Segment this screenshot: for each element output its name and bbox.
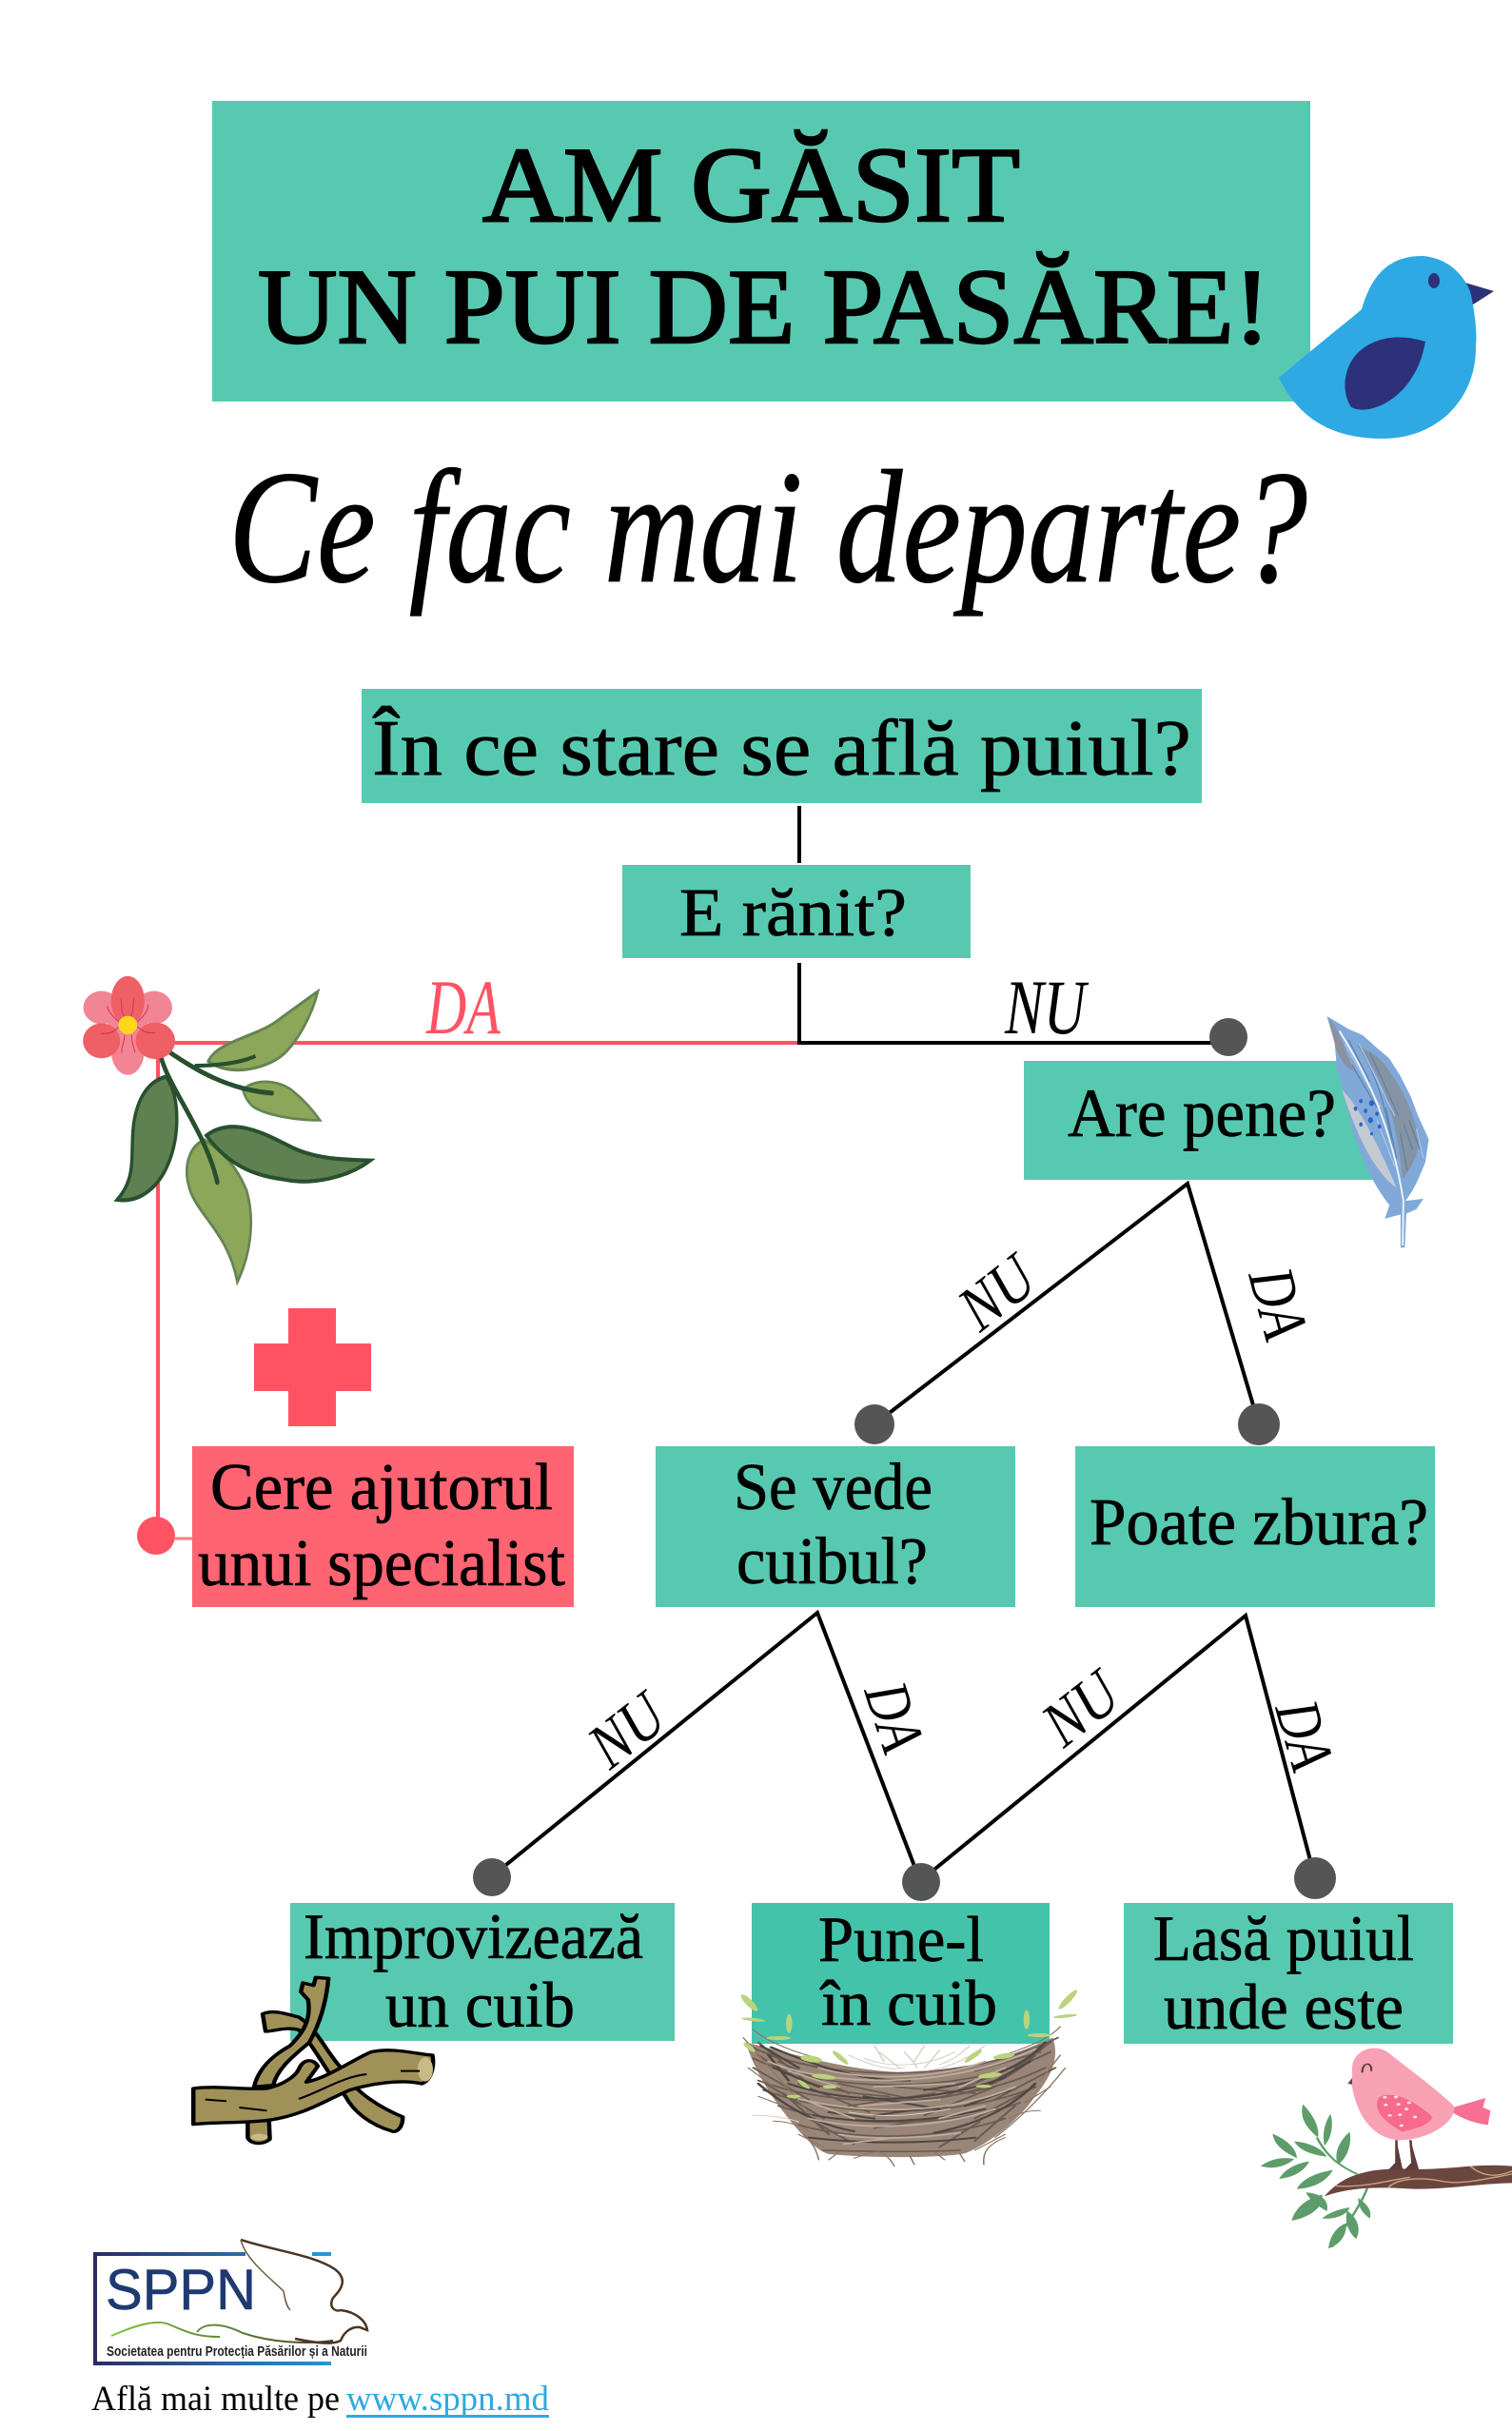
label: DA poate zbura: DA <box>1261 1692 1347 1778</box>
label: NU are pene: NU <box>944 1239 1051 1344</box>
label: DA se vede: DA <box>850 1673 938 1761</box>
box: pune-l <box>752 1903 1050 2044</box>
title banner: UN PUI DE PASĂRE! <box>258 248 1270 366</box>
dot: poate zbura <box>1238 1403 1280 1445</box>
box: main question: În ce stare se află puiul? <box>372 704 1191 793</box>
box: improvizeaza: un cuib <box>385 1969 575 2041</box>
dot: se vede <box>854 1404 894 1444</box>
connector: question to E rănit <box>797 806 801 863</box>
box: se vede cuibul <box>656 1446 1015 1607</box>
box: lasa puiul: unde este <box>1164 1970 1404 2043</box>
box: cere ajutorul: Cere ajutorul <box>210 1451 553 1524</box>
connector: are pene branches <box>874 1184 1259 1424</box>
label: DA red: DA <box>425 964 501 1050</box>
dot: red <box>137 1517 175 1555</box>
box: lasa puiul: Lasă puiul <box>1153 1902 1414 1974</box>
icon: nest <box>738 1989 1080 2166</box>
connector: black NU branch <box>799 963 1213 1043</box>
box: pune-l: Pune-l <box>818 1903 984 1975</box>
connector: poate zbura branches <box>920 1616 1315 1881</box>
connector: se vede branches <box>492 1613 920 1881</box>
label: NU se vede: NU <box>574 1676 681 1782</box>
box: improvizeaza <box>290 1900 675 2041</box>
box: are pene <box>1024 1061 1377 1180</box>
dot: improvizeaza <box>473 1858 511 1896</box>
icon: twigs <box>193 1977 433 2144</box>
box: e ranit <box>622 865 971 958</box>
box: improvizeaza: Improvizează <box>304 1900 643 1972</box>
footer text with link: Află mai multe pe <box>91 2380 340 2419</box>
title banner: AM GĂSIT <box>482 127 1020 245</box>
box: are pene: Are pene? <box>1068 1075 1336 1151</box>
connector: dot to cere ajutorul <box>175 1538 192 1539</box>
box: se vede cuibul: Se vede <box>734 1451 933 1524</box>
footer text with link <box>91 2380 549 2419</box>
label: DA are pene: DA <box>1234 1259 1323 1347</box>
dot: are pene <box>1209 1018 1247 1056</box>
footer text with link: www.sppn.md <box>346 2380 549 2419</box>
dot: lasa puiul <box>1294 1857 1336 1899</box>
box: poate zbura <box>1075 1446 1435 1607</box>
dot: pune-l <box>902 1863 940 1901</box>
box: pune-l: în cuib <box>819 1967 997 2039</box>
box: se vede cuibul: cuibul? <box>736 1525 928 1598</box>
box: cere ajutorul: unui specialist <box>198 1527 566 1600</box>
box: e ranit: E rănit? <box>679 874 907 951</box>
title banner <box>212 101 1310 402</box>
logo: SPPN: Societatea pentru Protecția Păsărilor și a Naturii <box>107 2343 367 2360</box>
box: lasa puiul <box>1124 1902 1453 2044</box>
icon: medical cross <box>254 1308 371 1426</box>
box: cere ajutorul <box>192 1446 574 1607</box>
box: poate zbura: Poate zbura? <box>1090 1486 1428 1559</box>
icon: feather <box>1326 1016 1429 1247</box>
flower and leaves <box>83 976 370 1282</box>
label: NU top: NU <box>1004 964 1090 1050</box>
logo: SPPN: SPPN <box>106 2258 256 2322</box>
connector: red DA branch <box>158 1043 799 1522</box>
icon: blue bird <box>1279 256 1494 439</box>
icon: pink bird on branch <box>1261 2049 1512 2248</box>
logo: SPPN <box>95 2240 367 2363</box>
label: NU poate zbura: NU <box>1028 1655 1135 1760</box>
subtitle: Ce fac mai departe? <box>228 438 1307 617</box>
